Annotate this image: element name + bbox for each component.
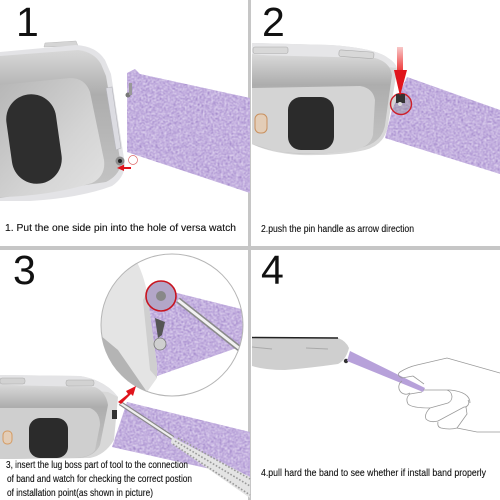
black sensor [29,418,68,458]
heading: 1: 1 [16,0,39,45]
tool in band [120,403,250,498]
watch: step 3 [0,375,118,459]
caption: step 2: 2.push the pin handle as arrow direction [261,224,414,235]
band: step 4 [347,351,425,392]
panel: step 4 [252,247,500,479]
black sensor [288,97,334,150]
charging contacts [255,114,267,133]
caption: step 3 [6,460,192,499]
pin circle and arrow [390,47,412,114]
panel: step 1 [0,0,250,234]
arrow to inset [118,386,136,404]
band: step 2 [385,76,500,176]
heading: 3: 3 [13,247,36,293]
watch: step 2 [252,43,397,155]
watch: step 1 [0,41,125,201]
heading: 2: 2 [262,0,285,45]
panel: step 2 [252,0,500,235]
caption: step 1: 1. Put the one side pin into the hole of versa watch [5,223,236,234]
black sensor pill [3,91,65,187]
caption: step 3: of band and watch for checking the correct postion [7,474,192,485]
panel: step 3 [0,247,250,499]
magnified inset [96,250,245,396]
band: step 3 [112,402,250,477]
watch: step 4 [252,338,349,370]
caption: step 3: of installation point(as shown in picture) [7,488,153,499]
pin hole and arrow [116,156,138,171]
charging contacts [3,431,12,444]
band: step 1 [125,68,250,194]
caption: step 3: 3, insert the lug boss part of tool to the connection [6,460,188,471]
hand outline [398,358,500,432]
heading: 4: 4 [261,247,284,293]
